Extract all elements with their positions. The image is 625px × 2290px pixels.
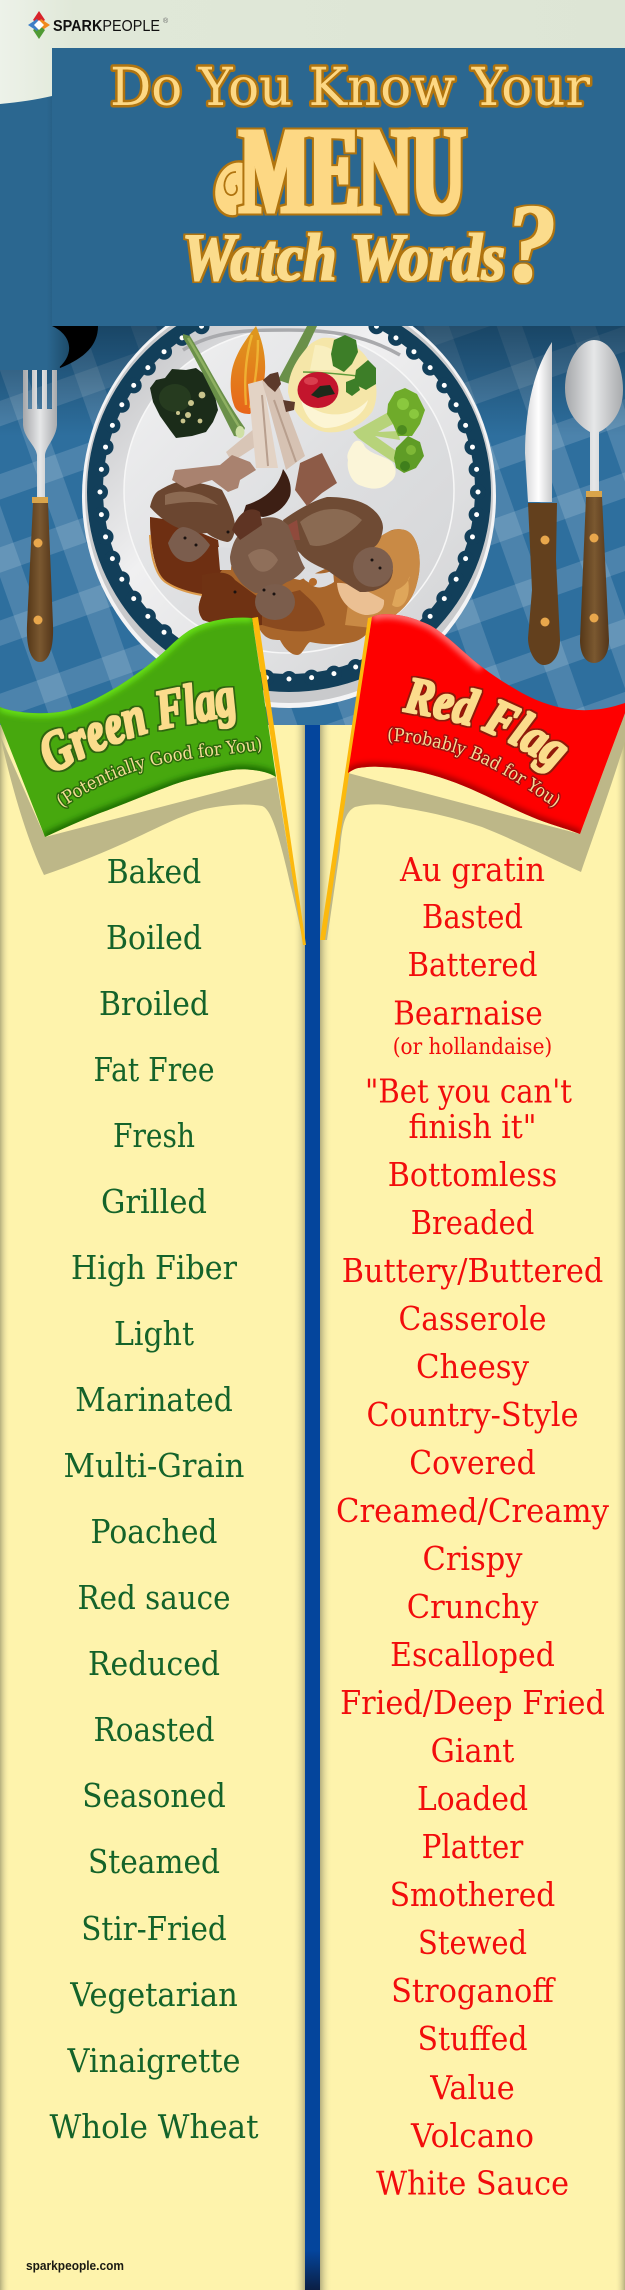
word: Whole Wheat: Whole Wheat (50, 2107, 258, 2146)
title word MENU: MENU (240, 102, 465, 240)
word: Battered: Battered (408, 945, 538, 984)
word: Value: Value (429, 2068, 515, 2107)
word: Vegetarian: Vegetarian (69, 1975, 238, 2014)
dark meat between bones (243, 469, 291, 517)
word: Fresh: Fresh (113, 1116, 195, 1155)
lamb chops (150, 453, 393, 620)
word: Poached: Poached (90, 1512, 218, 1551)
word: Steamed: Steamed (88, 1842, 220, 1881)
middle chop (230, 509, 305, 620)
word: Multi-Grain: Multi-Grain (64, 1446, 244, 1485)
spinach (150, 368, 218, 438)
icon: logo diamond (28, 11, 50, 39)
lamb bones (226, 372, 305, 470)
icon: fork (23, 370, 57, 662)
flag cloth (0, 610, 280, 840)
word: Marinated: Marinated (75, 1380, 233, 1419)
word: Giant: Giant (431, 1731, 514, 1770)
tomato (298, 372, 338, 408)
title line 1: Do You Know Your (110, 58, 590, 118)
left chop (150, 455, 256, 562)
plate (82, 284, 496, 708)
word: Stroganoff: Stroganoff (391, 1971, 556, 2010)
word: Boiled: Boiled (106, 918, 202, 957)
word: Platter: Platter (422, 1827, 524, 1866)
word: Bet you can't: "Bet you can't (365, 1072, 572, 1110)
mashed potato (288, 338, 376, 432)
word: Creamed/Creamy: Creamed/Creamy (336, 1491, 609, 1530)
flag title: Green Flag (40, 680, 238, 772)
broccoli (353, 388, 425, 473)
word: Smothered: Smothered (390, 1875, 555, 1914)
word: Casserole: Casserole (398, 1299, 546, 1338)
panel: cream columns (0, 725, 625, 2290)
word: Stir-Fried: Stir-Fried (81, 1909, 227, 1948)
red flag word list (336, 850, 609, 2202)
word: Broiled: Broiled (99, 984, 209, 1023)
asparagus (183, 326, 317, 438)
green flag (0, 617, 306, 945)
word: Buttery/Buttered: Buttery/Buttered (342, 1251, 603, 1290)
word: Roasted: Roasted (94, 1710, 214, 1749)
right chop (283, 453, 393, 592)
footer: source url: sparkpeople.com (26, 2259, 124, 2273)
cauliflower (347, 441, 396, 489)
word: White Sauce: White Sauce (376, 2164, 569, 2202)
swirl of M (214, 161, 250, 216)
word: Cheesy: Cheesy (416, 1347, 529, 1386)
word: Bottomless: Bottomless (388, 1155, 557, 1194)
icon: spoon (565, 340, 623, 663)
word: Grilled: Grilled (101, 1182, 207, 1221)
word: Stuffed: Stuffed (418, 2019, 528, 2058)
food on plate (150, 326, 425, 655)
logo wordmark: SPARKPEOPLE (53, 18, 160, 35)
flag shadow (323, 713, 625, 940)
tablecloth: blue plaid (0, 320, 625, 736)
red flag (320, 614, 625, 940)
word: Crunchy: Crunchy (407, 1587, 539, 1626)
word: Bearnaise: Bearnaise (393, 994, 543, 1032)
word: Escalloped: Escalloped (390, 1635, 555, 1674)
carrot (231, 326, 265, 414)
word: Country-Style: Country-Style (366, 1395, 578, 1434)
question mark: ? (506, 182, 556, 306)
flag shadow (0, 735, 304, 945)
word: Volcano: Volcano (410, 2116, 534, 2155)
word: Stewed: Stewed (418, 1923, 527, 1962)
flag pole (320, 617, 372, 940)
title line 3: Watch Words (182, 219, 505, 295)
green flag word list (50, 852, 258, 2146)
centre pole bar (305, 725, 320, 2290)
word: Loaded: Loaded (417, 1779, 528, 1818)
flag subtitle: (Probably Bad for You) (387, 726, 561, 809)
word: Breaded: Breaded (411, 1203, 534, 1242)
word: Fried/Deep Fried: Fried/Deep Fried (340, 1683, 605, 1722)
word: Crispy: Crispy (422, 1539, 523, 1578)
ribbon fold: left (0, 96, 98, 370)
word: Light: Light (114, 1314, 194, 1353)
word: Fat Free: Fat Free (94, 1050, 214, 1089)
page background top (0, 0, 625, 130)
note: or hollandaise: (or hollandaise) (393, 1035, 552, 1060)
word: Seasoned: Seasoned (82, 1776, 226, 1815)
flag cloth (345, 610, 625, 840)
word: Reduced: Reduced (88, 1644, 220, 1683)
parsley (303, 335, 376, 396)
flag subtitle: (Potentially Good for You) (56, 735, 262, 809)
word: finish it: finish it" (408, 1107, 536, 1146)
word: Vinaigrette: Vinaigrette (67, 2041, 241, 2080)
word: Red sauce: Red sauce (78, 1578, 230, 1617)
flag pole (252, 617, 306, 945)
word: Au gratin: Au gratin (399, 850, 545, 889)
word: Basted: Basted (422, 897, 523, 936)
icon: knife (525, 342, 560, 665)
flag title: Red Flag (400, 676, 570, 776)
header banner (52, 48, 625, 326)
word: Baked: Baked (107, 852, 201, 891)
title (110, 58, 590, 306)
word: High Fiber: High Fiber (71, 1248, 237, 1287)
word: Covered: Covered (409, 1443, 536, 1482)
sauce (150, 517, 420, 655)
logo: SparkPeople (28, 11, 169, 39)
registered mark: ® (163, 17, 169, 25)
